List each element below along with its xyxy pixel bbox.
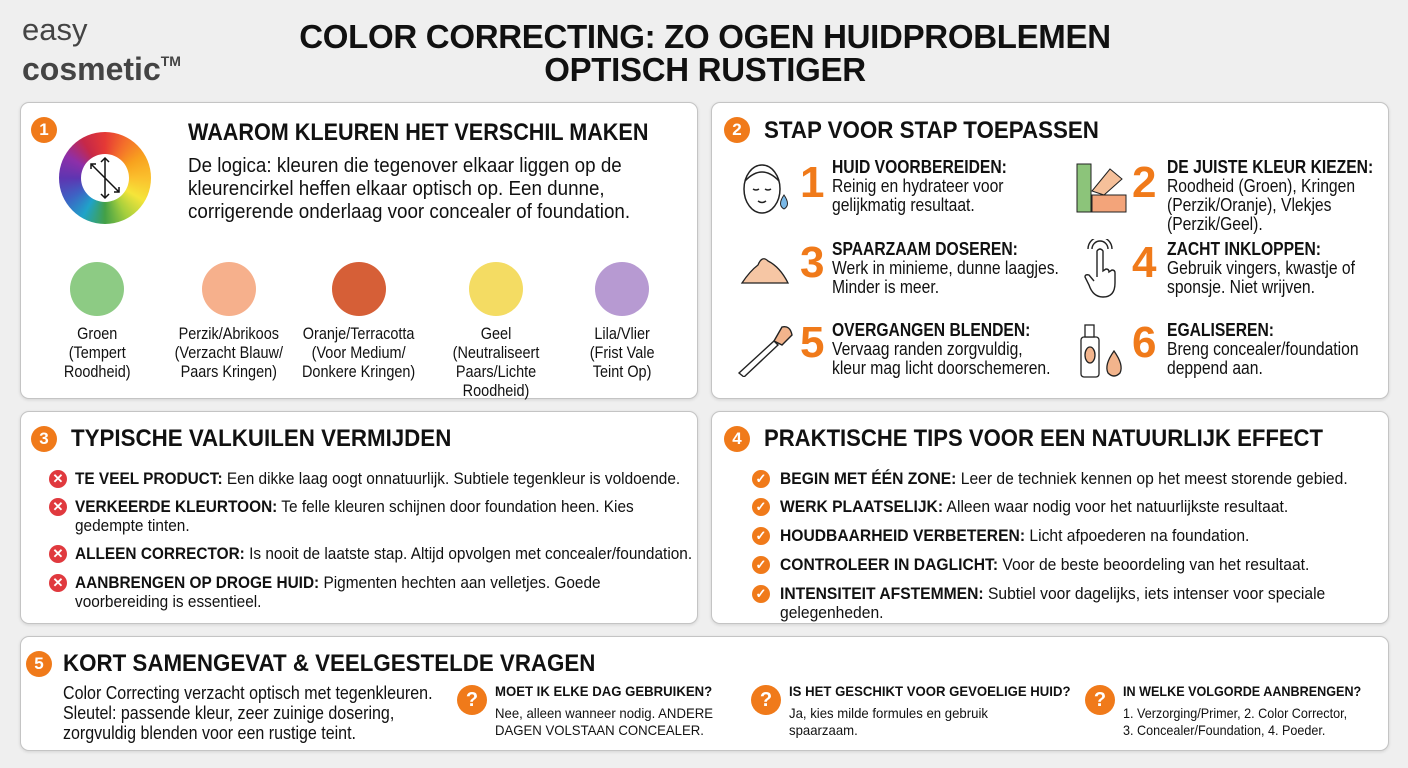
faq 1: MOET IK ELKE DAG GEBRUIKEN?: [495, 683, 712, 699]
logo: [22, 12, 181, 87]
badge 5: [26, 651, 52, 677]
icon: color wheel: [59, 132, 151, 224]
panel: stap voor stap: 3: [800, 238, 824, 287]
list: ALLEEN CORRECTOR: Is nooit de laatste stap. Altijd opvolgen met concealer/foundation.: [75, 544, 692, 563]
swatches: (Frist Vale: [590, 343, 654, 362]
panel: stap voor stap: EGALISEREN:: [1167, 320, 1274, 340]
icon: cream dollop: [740, 258, 789, 284]
swatches: Paars/Lichte: [456, 362, 536, 381]
swatches: Groen: [77, 324, 117, 343]
badge 3: 3: [39, 429, 49, 448]
icon: bottle and sponge: [1080, 324, 1122, 378]
panel: stap voor stap: gelijkmatig resultaat.: [832, 195, 975, 215]
panel: stap voor stap: sponsje. Niet wrijven.: [1167, 277, 1315, 297]
faq 3: ?: [1094, 689, 1106, 711]
title: COLOR CORRECTING: ZO OGEN HUIDPROBLEMEN: [299, 18, 1111, 55]
faq 2: spaarzaam.: [789, 722, 858, 738]
title: OPTISCH RUSTIGER: [544, 51, 866, 88]
logo: cosmeticTM: [22, 51, 181, 87]
panel: stap voor stap: (Perzik/Geel).: [1167, 214, 1263, 234]
icon: swatches: [1076, 164, 1126, 212]
faq 2: Ja, kies milde formules en gebruik: [789, 705, 988, 721]
swatches: Oranje/Terracotta: [303, 324, 415, 343]
title: [299, 18, 1111, 88]
list: BEGIN MET ÉÉN ZONE: Leer de techniek kennen op het meest storende gebied.: [780, 469, 1348, 488]
list: WERK PLAATSELIJK: Alleen waar nodig voor het natuurlijkste resultaat.: [780, 497, 1288, 516]
faq 2: ?: [760, 689, 772, 711]
panel: stap voor stap: Werk in minieme, dunne laagjes.: [832, 258, 1059, 278]
icon: brush: [738, 326, 793, 377]
panel: stap voor stap: kleur mag licht doorschemeren.: [832, 358, 1050, 378]
panel: stap voor stap: Minder is meer.: [832, 277, 939, 297]
panel: stap voor stap: Breng concealer/foundation: [1167, 339, 1359, 359]
list: voorbereiding is essentieel.: [75, 592, 261, 611]
swatches: Lila/Vlier: [594, 324, 650, 343]
swatches: Paars Kringen): [181, 362, 277, 381]
swatches: (Verzacht Blauw/: [175, 343, 283, 362]
faq 1: Nee, alleen wanneer nodig. ANDERE: [495, 705, 713, 721]
summary text: Sleutel: passende kleur, zeer zuinige dosering,: [63, 703, 394, 723]
faq 1: DAGEN VOLSTAAN CONCEALER.: [495, 722, 704, 738]
panel: stap voor stap: SPAARZAAM DOSEREN:: [832, 239, 1018, 259]
icon: hand tap: [1084, 239, 1116, 298]
panel: stap voor stap: ZACHT INKLOPPEN:: [1167, 239, 1321, 259]
panel: stap voor stap: 1: [800, 158, 824, 207]
list: ✓: [756, 471, 766, 486]
faq 3: 3. Concealer/Foundation, 4. Poeder.: [1123, 722, 1325, 738]
list: ✓: [756, 557, 766, 572]
badge 5: 5: [34, 654, 44, 673]
heading: TYPISCHE VALKUILEN VERMIJDEN: [71, 425, 451, 452]
list: HOUDBAARHEID VERBETEREN: Licht afpoederen na foundation.: [780, 526, 1249, 545]
panel: stap voor stap: 5: [800, 318, 824, 367]
panel: stap voor stap: 4: [1132, 238, 1156, 287]
panel: valkuilen: [20, 411, 698, 624]
list: ✓: [756, 499, 766, 514]
panel: stap voor stap: deppend aan.: [1167, 358, 1263, 378]
heading: WAAROM KLEUREN HET VERSCHIL MAKEN: [188, 119, 648, 146]
list: ✓: [756, 528, 766, 543]
panel: stap voor stap: OVERGANGEN BLENDEN:: [832, 320, 1030, 340]
list: [752, 469, 1348, 622]
panel: stap voor stap: Vervaag randen zorgvuldig,: [832, 339, 1023, 359]
swatches: Geel: [481, 324, 511, 343]
panel: stap voor stap: Reinig en hydrateer voor: [832, 176, 1003, 196]
list: AANBRENGEN OP DROGE HUID: Pigmenten hechten aan velletjes. Goede: [75, 573, 601, 592]
swatches: [64, 262, 654, 400]
badge 1: [31, 117, 57, 143]
panel: samenvatting en faq: [20, 636, 1389, 751]
swatches: Teint Op): [593, 362, 651, 381]
list: ✕: [53, 575, 63, 590]
panel: stap voor stap: 2: [1132, 158, 1156, 207]
text: De logica: kleuren die tegenover elkaar liggen op de: [188, 155, 622, 177]
swatches: (Tempert: [68, 343, 126, 362]
list: ✕: [53, 471, 63, 486]
list: ✓: [756, 586, 766, 601]
text: [188, 155, 630, 223]
panel: waarom kleuren: [20, 102, 698, 399]
panel: stap voor stap: Gebruik vingers, kwastje of: [1167, 258, 1355, 278]
text: corrigerende onderlaag voor concealer of foundation.: [188, 201, 630, 223]
panel: stap voor stap: HUID VOORBEREIDEN:: [832, 157, 1007, 177]
summary text: Color Correcting verzacht optisch met tegenkleuren.: [63, 683, 433, 703]
badge 4: 4: [732, 429, 742, 448]
list: gedempte tinten.: [75, 516, 190, 535]
badge 2: 2: [732, 120, 742, 139]
swatches: Roodheid): [64, 362, 130, 381]
faq 3: IN WELKE VOLGORDE AANBRENGEN?: [1123, 683, 1361, 699]
panel: stap voor stap: Roodheid (Groen), Kringen: [1167, 176, 1355, 196]
faq 3: 1. Verzorging/Primer, 2. Color Corrector,: [1123, 705, 1347, 721]
faq 2: [751, 683, 1071, 738]
badge 1: 1: [39, 120, 49, 139]
faq 3: [1085, 683, 1361, 738]
summary text: zorgvuldig blenden voor een rustige teint.: [63, 723, 356, 743]
faq 1: ?: [466, 689, 478, 711]
heading: PRAKTISCHE TIPS VOOR EEN NATUURLIJK EFFECT: [764, 425, 1323, 452]
panel: stap voor stap: DE JUISTE KLEUR KIEZEN:: [1167, 157, 1373, 177]
badge 2: [724, 117, 750, 143]
list: CONTROLEER IN DAGLICHT: Voor de beste beoordeling van het resultaat.: [780, 555, 1309, 574]
list: gelegenheden.: [780, 603, 884, 622]
panel: stap voor stap: 6: [1132, 318, 1156, 367]
swatches: Donkere Kringen): [302, 362, 416, 381]
panel: stap voor stap: (Perzik/Oranje), Vlekjes: [1167, 195, 1331, 215]
swatches: Perzik/Abrikoos: [179, 324, 279, 343]
list: ✕: [53, 546, 63, 561]
list: VERKEERDE KLEURTOON: Te felle kleuren schijnen door foundation heen. Kies: [75, 497, 634, 516]
heading: KORT SAMENGEVAT & VEELGESTELDE VRAGEN: [63, 650, 595, 677]
panel: stap voor stap: [711, 102, 1389, 399]
badge 3: [31, 426, 57, 452]
text: kleurencirkel heffen elkaar optisch op. Een dunne,: [188, 178, 605, 200]
icon: face: [743, 164, 788, 214]
faq 2: IS HET GESCHIKT VOOR GEVOELIGE HUID?: [789, 683, 1071, 699]
summary text: [63, 683, 433, 743]
list: TE VEEL PRODUCT: Een dikke laag oogt onnatuurlijk. Subtiele tegenkleur is voldoende.: [75, 469, 680, 488]
list: [49, 469, 692, 611]
logo: easy: [22, 12, 87, 47]
faq 1: [457, 683, 713, 738]
swatches: Roodheid): [463, 381, 529, 400]
swatches: (Voor Medium/: [312, 343, 406, 362]
panel: praktische tips: [711, 411, 1389, 624]
badge 4: [724, 426, 750, 452]
list: ✕: [53, 499, 63, 514]
swatches: (Neutraliseert: [453, 343, 539, 362]
heading: STAP VOOR STAP TOEPASSEN: [764, 117, 1099, 144]
list: INTENSITEIT AFSTEMMEN: Subtiel voor dagelijks, iets intenser voor speciale: [780, 584, 1325, 603]
